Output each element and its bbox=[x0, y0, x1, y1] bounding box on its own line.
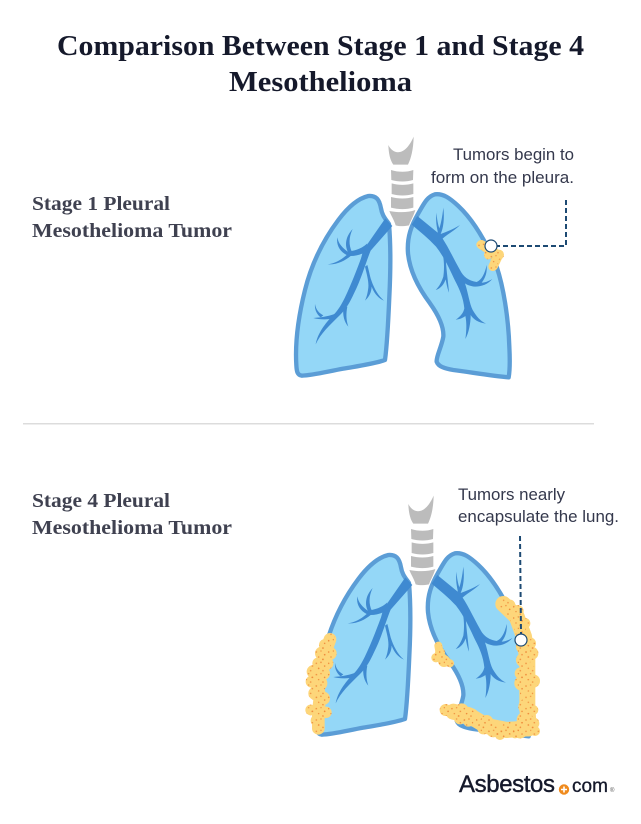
heading: stage 1: Stage 1 Pleural bbox=[32, 193, 170, 215]
title: Mesothelioma bbox=[229, 67, 412, 98]
logo: Asbestos.com: com bbox=[572, 776, 608, 797]
title: Comparison Between Stage 1 and Stage 4 bbox=[57, 31, 584, 62]
illustration: stage 1 lungs bbox=[296, 137, 510, 377]
heading: stage 4: Mesothelioma Tumor bbox=[32, 517, 232, 539]
leader line: stage 4 bbox=[515, 536, 527, 646]
heading: stage 4: Stage 4 Pleural bbox=[32, 490, 170, 512]
callout: stage 4 text: encapsulate the lung. bbox=[458, 507, 619, 526]
callout: stage 1 text: form on the pleura. bbox=[431, 168, 574, 187]
title bbox=[57, 31, 584, 98]
callout: stage 1 text: Tumors begin to bbox=[453, 145, 574, 164]
logo: Asbestos.com: Asbestos bbox=[459, 771, 555, 798]
heading: stage 4 bbox=[32, 490, 232, 539]
heading: stage 1: Mesothelioma Tumor bbox=[32, 220, 232, 242]
illustration: stage 4 lungs bbox=[305, 496, 540, 740]
tumors: encapsulating growth bbox=[305, 599, 540, 740]
heading: stage 1 bbox=[32, 193, 232, 242]
logo: Asbestos.com bbox=[459, 771, 615, 798]
lungs bbox=[316, 496, 530, 736]
callout: stage 4 text: Tumors nearly bbox=[458, 485, 565, 504]
divider bbox=[23, 423, 594, 424]
icon: orange plus bbox=[559, 784, 569, 795]
leader line: stage 1 bbox=[485, 200, 566, 252]
tumor: small pleural growth bbox=[476, 241, 504, 271]
logo: Asbestos.com: ® bbox=[610, 787, 615, 794]
callout: stage 1 text bbox=[431, 145, 574, 187]
callout: stage 4 text bbox=[458, 485, 619, 526]
